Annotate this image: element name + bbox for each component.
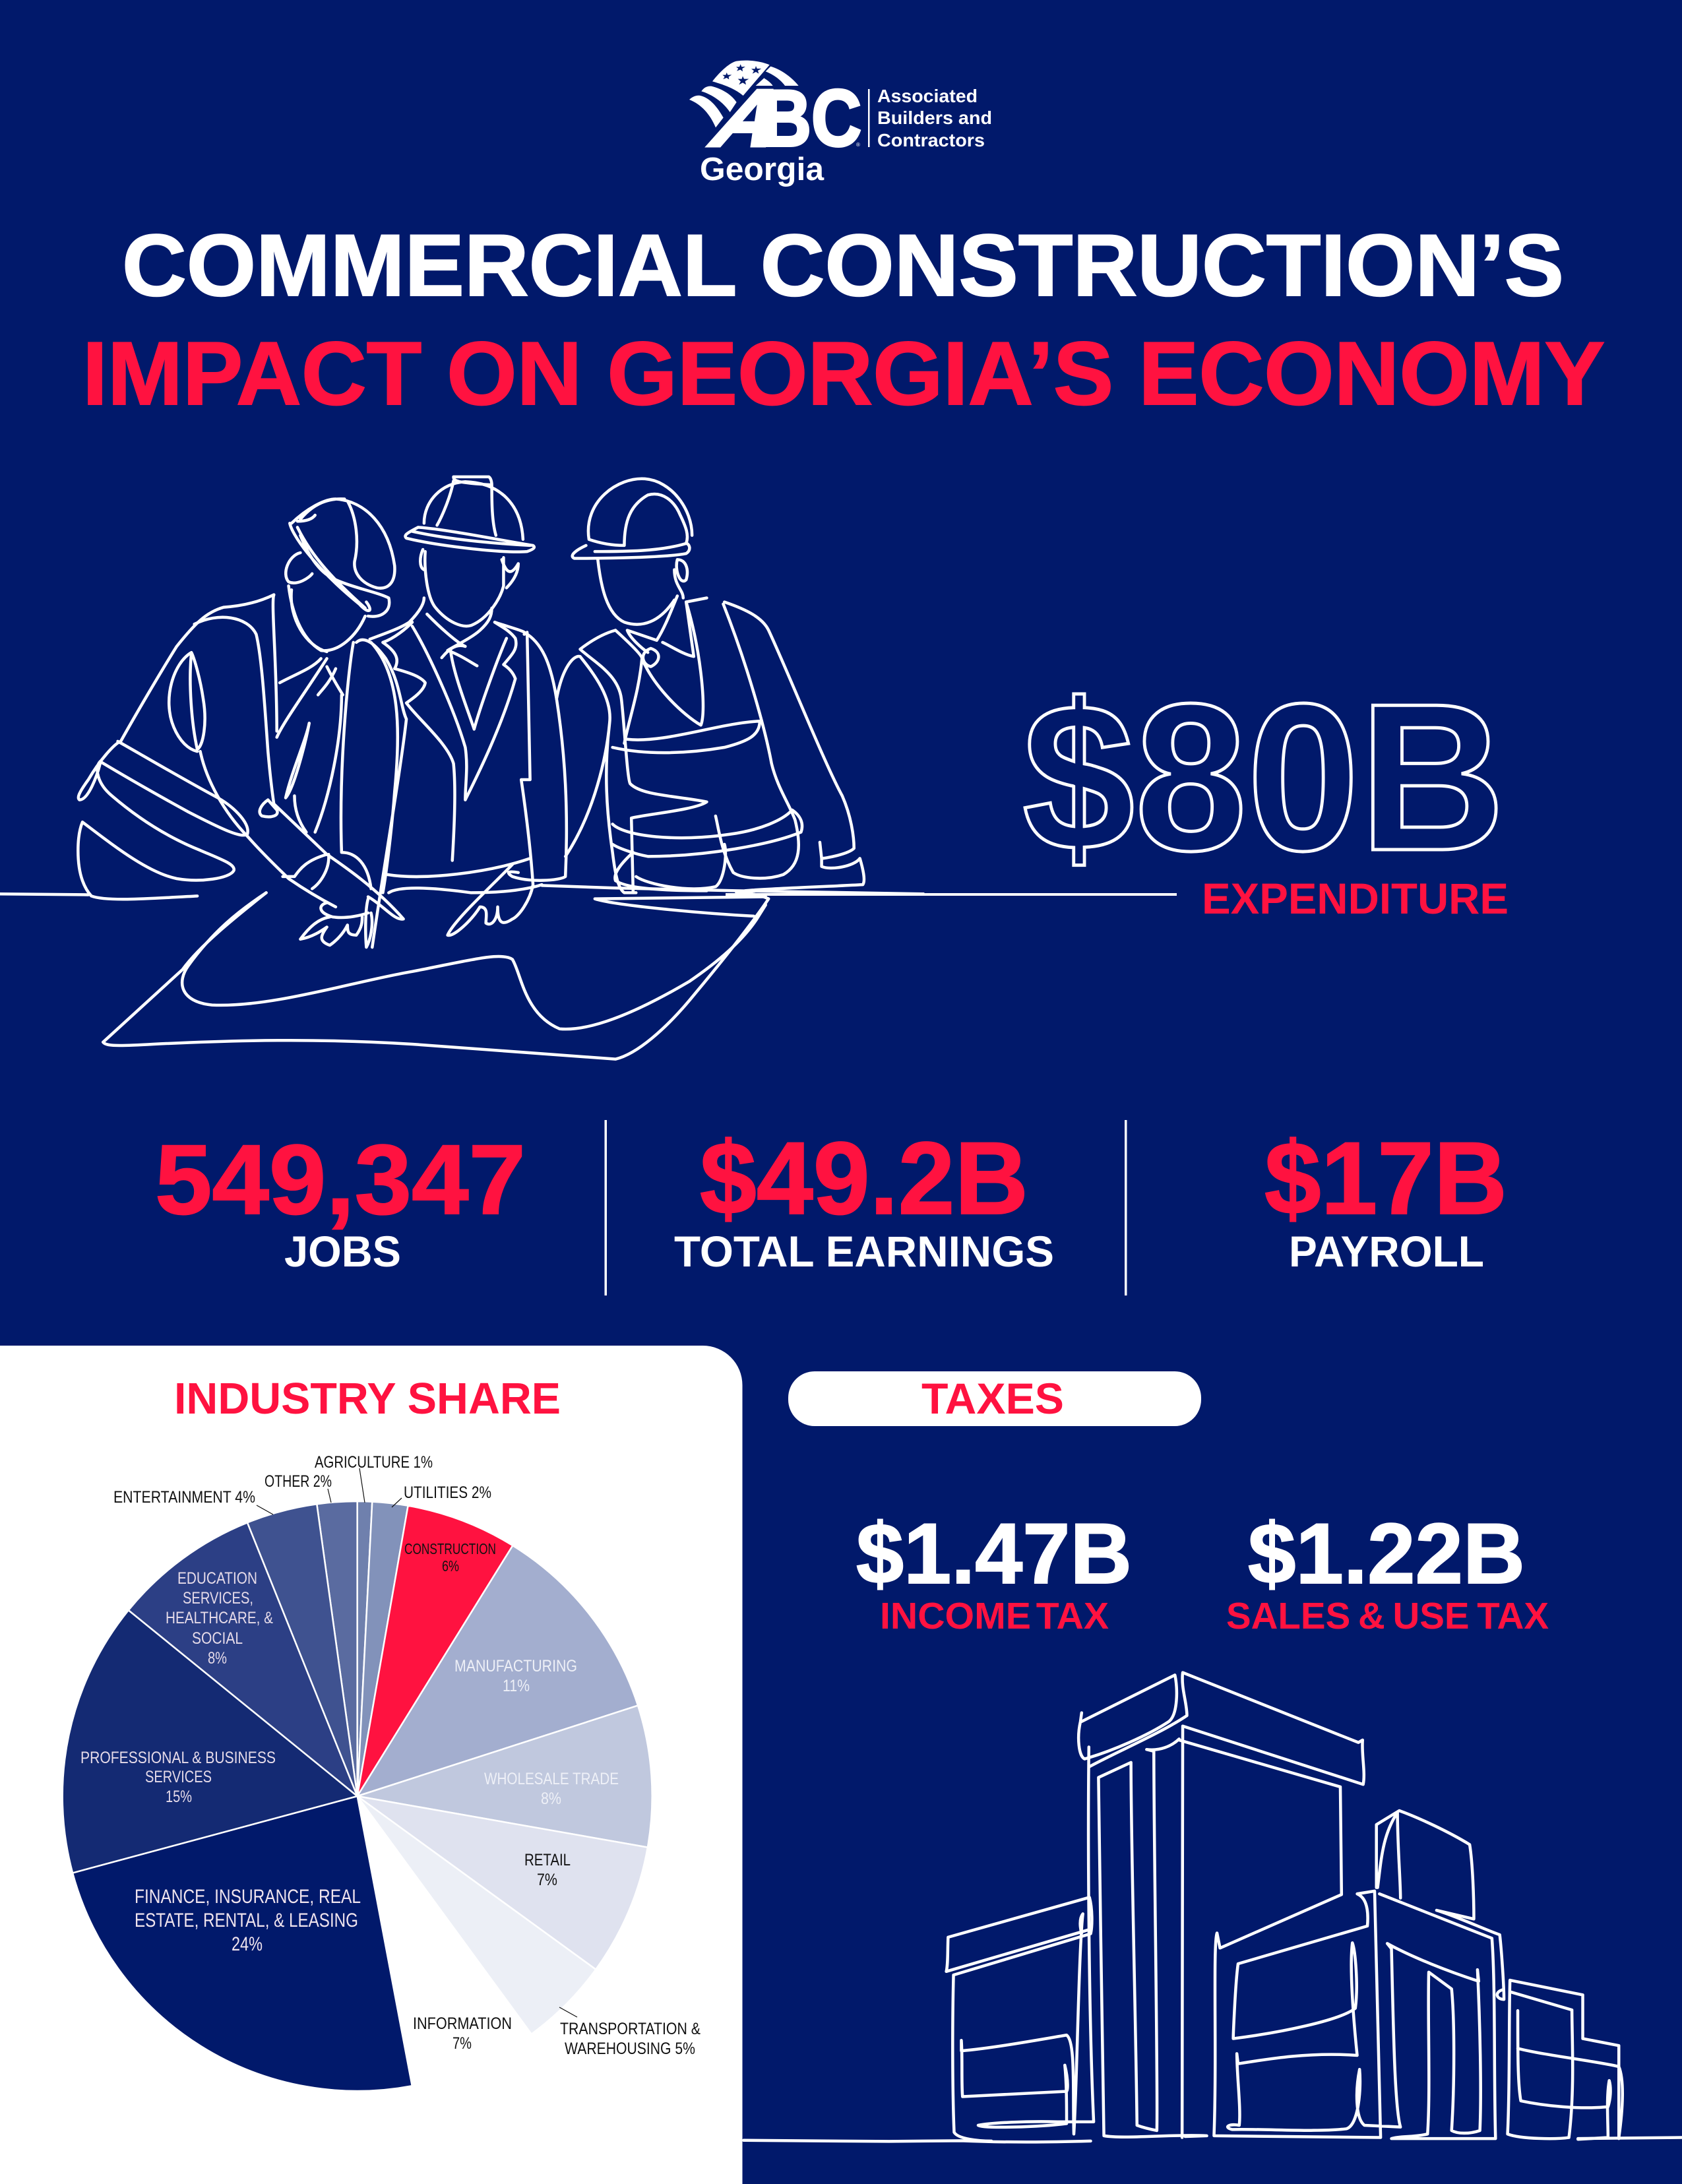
- title line 2: IMPACT ON GEORGIA’S ECONOMY: [82, 323, 1605, 423]
- label: education: EDUCATION: [177, 1569, 257, 1588]
- label: professional: SERVICES: [145, 1768, 212, 1786]
- stat: jobs: 549,347: [155, 1124, 526, 1235]
- label: education: [166, 1569, 273, 1668]
- stat: sales and use tax: [1226, 1505, 1549, 1637]
- label: manufacturing: [454, 1657, 577, 1695]
- label: professional: PROFESSIONAL & BUSINESS: [80, 1749, 276, 1767]
- logo wordmark: Builders and: [877, 108, 992, 128]
- stat: sales and use tax: SALES & USE TAX: [1226, 1595, 1549, 1637]
- label: finance: [135, 1886, 361, 1955]
- pie labels: [80, 1453, 701, 2058]
- label: professional: 15%: [166, 1788, 192, 1806]
- label: transportation: WAREHOUSING 5%: [565, 2040, 695, 2058]
- stat: sales and use tax: $1.22B: [1248, 1505, 1525, 1602]
- logo state name: Georgia: [700, 152, 825, 187]
- taxes pill heading: [788, 1371, 1201, 1426]
- logo wordmark: Associated: [877, 86, 978, 106]
- panel: industry share: [0, 1346, 743, 2184]
- label: construction: 6%: [442, 1557, 459, 1575]
- pie chart: [63, 1501, 652, 2091]
- illustration: three construction workers over blueprint: [0, 477, 923, 1059]
- label: finance: FINANCE, INSURANCE, REAL: [135, 1886, 361, 1908]
- label: manufacturing: 11%: [503, 1677, 530, 1695]
- label: retail: [524, 1851, 571, 1889]
- logo letters BC: BC: [761, 73, 861, 163]
- label: retail: RETAIL: [524, 1851, 571, 1869]
- icon: flag mark: [689, 61, 799, 127]
- label: utilities: UTILITIES 2%: [404, 1483, 491, 1502]
- label: other: OTHER 2%: [265, 1472, 332, 1491]
- table line to expenditure: [726, 893, 1177, 896]
- stat: income tax: $1.47B: [856, 1505, 1132, 1602]
- label: retail: 7%: [537, 1871, 557, 1889]
- label: education: 8%: [208, 1649, 227, 1668]
- label: finance: 24%: [232, 1933, 263, 1955]
- label: construction: CONSTRUCTION: [404, 1540, 496, 1557]
- logo wordmark: [877, 86, 992, 150]
- stat: payroll: $17B: [1264, 1121, 1507, 1236]
- logo wordmark: Contractors: [877, 130, 985, 150]
- label: construction: [404, 1540, 496, 1575]
- taxes pill heading: TAXES: [921, 1374, 1064, 1423]
- label: information: 7%: [452, 2034, 472, 2053]
- label: education: SOCIAL: [192, 1629, 243, 1648]
- label: wholesale trade: WHOLESALE TRADE: [484, 1770, 619, 1788]
- label: wholesale trade: [484, 1770, 619, 1808]
- stat: $80B expenditure: [1022, 660, 1509, 923]
- label: education: SERVICES,: [183, 1589, 253, 1607]
- label: wholesale trade: 8%: [541, 1790, 561, 1808]
- heading: industry share: INDUSTRY SHARE: [174, 1374, 561, 1423]
- label: entertainment: ENTERTAINMENT 4%: [113, 1488, 255, 1507]
- illustration: commercial buildings line art: [743, 1673, 1682, 2142]
- stat: total earnings: [674, 1121, 1054, 1276]
- label: finance: ESTATE, RENTAL, & LEASING: [135, 1910, 358, 1931]
- label: information: [413, 2014, 512, 2053]
- label: agriculture: AGRICULTURE 1%: [315, 1453, 433, 1472]
- label: professional: [80, 1749, 276, 1806]
- label: transportation: [560, 2020, 701, 2058]
- label: education: HEALTHCARE, &: [166, 1609, 273, 1627]
- label: manufacturing: MANUFACTURING: [454, 1657, 577, 1675]
- label: transportation: TRANSPORTATION &: [560, 2020, 701, 2038]
- stat: total earnings: $49.2B: [700, 1121, 1028, 1236]
- logo letter A: A: [697, 74, 803, 163]
- logo: ABC Georgia: [689, 61, 992, 187]
- expenditure label: EXPENDITURE: [1202, 874, 1509, 923]
- label: information: INFORMATION: [413, 2014, 512, 2033]
- stat: jobs: JOBS: [284, 1227, 401, 1276]
- stat: payroll: PAYROLL: [1289, 1227, 1484, 1276]
- title: [82, 217, 1605, 423]
- pie leader lines: [257, 1468, 577, 2017]
- stat: total earnings: TOTAL EARNINGS: [674, 1227, 1054, 1276]
- title line 1: COMMERCIAL CONSTRUCTION’S: [122, 217, 1564, 315]
- stat: income tax: INCOME TAX: [880, 1595, 1109, 1637]
- outlined figure: $80B: [1022, 660, 1505, 894]
- logo: ABC Georgia: ®: [856, 142, 860, 148]
